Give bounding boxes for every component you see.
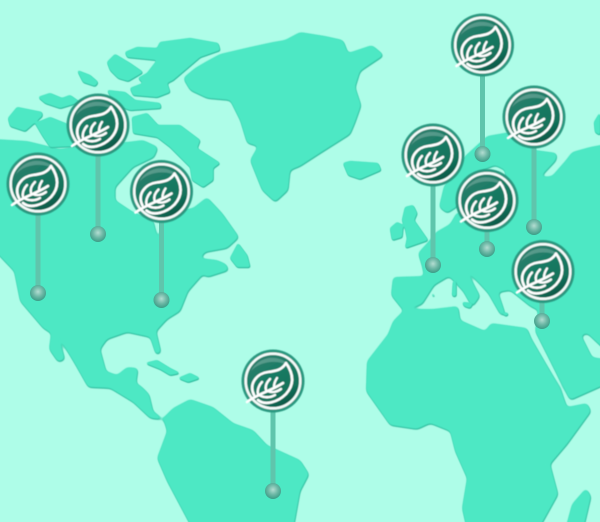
pin: western North America [6,152,70,301]
Arctic islands [8,38,220,147]
South America [157,399,309,522]
Eurasia [391,132,600,400]
North and Central America [0,139,239,420]
Mediterranean islands [431,281,509,316]
British Isles [390,205,428,248]
Baffin Island [132,113,220,187]
pin: South America [242,350,304,499]
pin: western Europe [402,124,464,273]
pin: north-western Russia [502,86,566,235]
Greenland [183,32,384,202]
pin: eastern North America [130,160,193,308]
Far north-east island [594,112,600,135]
small islands [8,38,600,382]
Newfoundland [230,243,250,267]
pin: Middle East [512,240,574,329]
Africa [366,306,591,522]
pin: northern Scandinavia [451,14,514,162]
pin: northern Canada [66,94,130,242]
Madagascar [565,488,591,522]
Iceland [343,161,381,179]
pin: central Europe [456,169,518,257]
Caribbean islands [145,360,200,382]
